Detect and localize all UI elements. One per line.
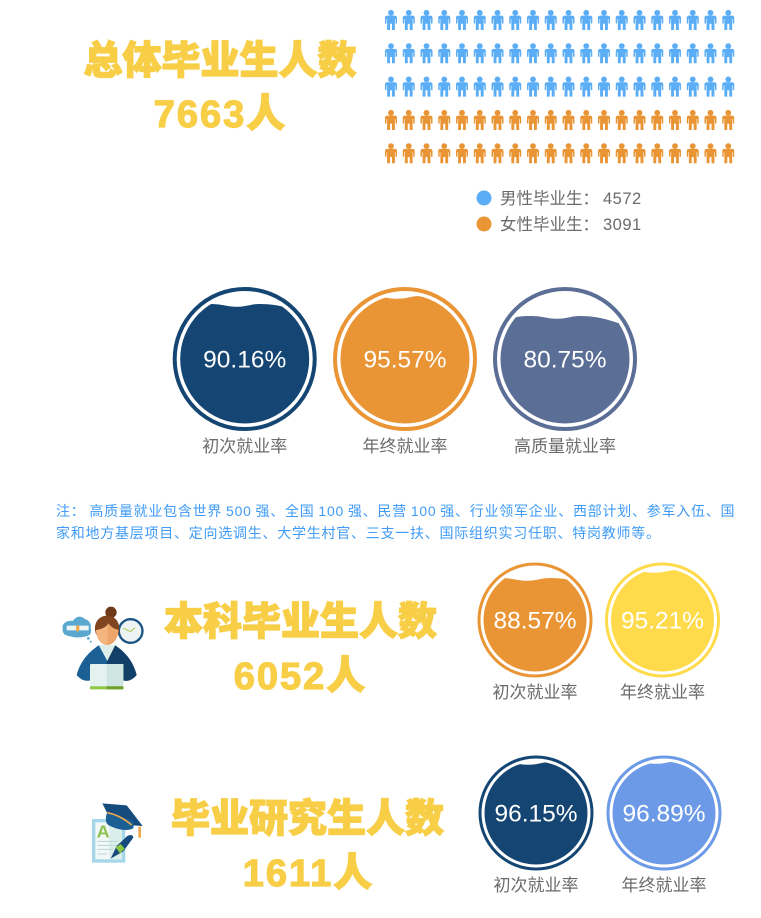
gauge: postgraduate initial rate 96.15%: 初次就业率 (494, 871, 578, 896)
gauge: undergraduate year-end rate 95.21%: 年终就业率 (620, 678, 705, 703)
legend: gender counts: 3091 (603, 216, 642, 234)
gauge: initial employment rate 90.16% (172, 287, 317, 454)
title: total graduates (83, 30, 357, 139)
gauge: initial employment rate 90.16%: 90.16% (203, 346, 286, 374)
gauge: postgraduate initial rate 96.15%: 96.15% (494, 800, 578, 828)
note text (56, 501, 735, 543)
title: total graduates: 总体毕业生人数 (83, 30, 357, 86)
gauge: initial employment rate 90.16%: 初次就业率 (202, 432, 287, 457)
title: postgraduates: 1611人 (243, 842, 372, 898)
gauge: year-end employment rate 95.57%: 95.57% (363, 346, 447, 374)
gauge: undergraduate year-end rate 95.21%: 95.21% (621, 608, 704, 634)
gauge: high-quality employment rate 80.75%: 高质量就业率 (514, 432, 616, 457)
legend: gender counts (476, 185, 642, 235)
icon: graduation cap and paper (92, 803, 143, 863)
gauge: postgraduate year-end rate 96.89% (606, 756, 722, 892)
legend: gender counts: 4572 (603, 190, 642, 208)
note text: 注： 高质量就业包含世界 500 强、全国 100 强、民营 100 强、行业领军企业、西部计划、参军入伍、国 (56, 501, 735, 521)
title: postgraduates: 毕业研究生人数 (171, 788, 444, 844)
gauge: undergraduate initial rate 88.57%: 88.57% (493, 608, 577, 634)
gauge: undergraduate initial rate 88.57% (478, 562, 592, 700)
legend: gender counts: 男性毕业生： (500, 185, 599, 209)
pictogram: graduates by gender (385, 10, 734, 163)
icon: graduation cap and paper: A (97, 821, 110, 841)
legend: gender counts: 女性毕业生： (500, 211, 599, 235)
gauge: postgraduate year-end rate 96.89%: 96.89% (622, 800, 706, 828)
gauge: high-quality employment rate 80.75% (493, 287, 637, 454)
gauge: year-end employment rate 95.57% (333, 287, 477, 454)
title: total graduates: 7663人 (154, 83, 285, 139)
title: undergraduates: 本科毕业生人数 (164, 591, 437, 647)
gauge: undergraduate year-end rate 95.21% (605, 562, 720, 700)
icon: woman with laptop (62, 607, 144, 689)
gauge: postgraduate initial rate 96.15% (478, 756, 594, 893)
title: undergraduates: 6052人 (234, 645, 365, 701)
title: postgraduates (171, 788, 444, 898)
gauge: year-end employment rate 95.57%: 年终就业率 (362, 432, 448, 457)
gauge: undergraduate initial rate 88.57%: 初次就业率 (492, 678, 578, 703)
gauge: postgraduate year-end rate 96.89%: 年终就业率 (622, 871, 706, 896)
gauge: high-quality employment rate 80.75%: 80.75% (523, 346, 607, 374)
title: undergraduates (164, 591, 437, 701)
note text: 家和地方基层项目、定向选调生、大学生村官、三支一扶、国际组织实习任职、特岗教师等。 (56, 523, 661, 543)
